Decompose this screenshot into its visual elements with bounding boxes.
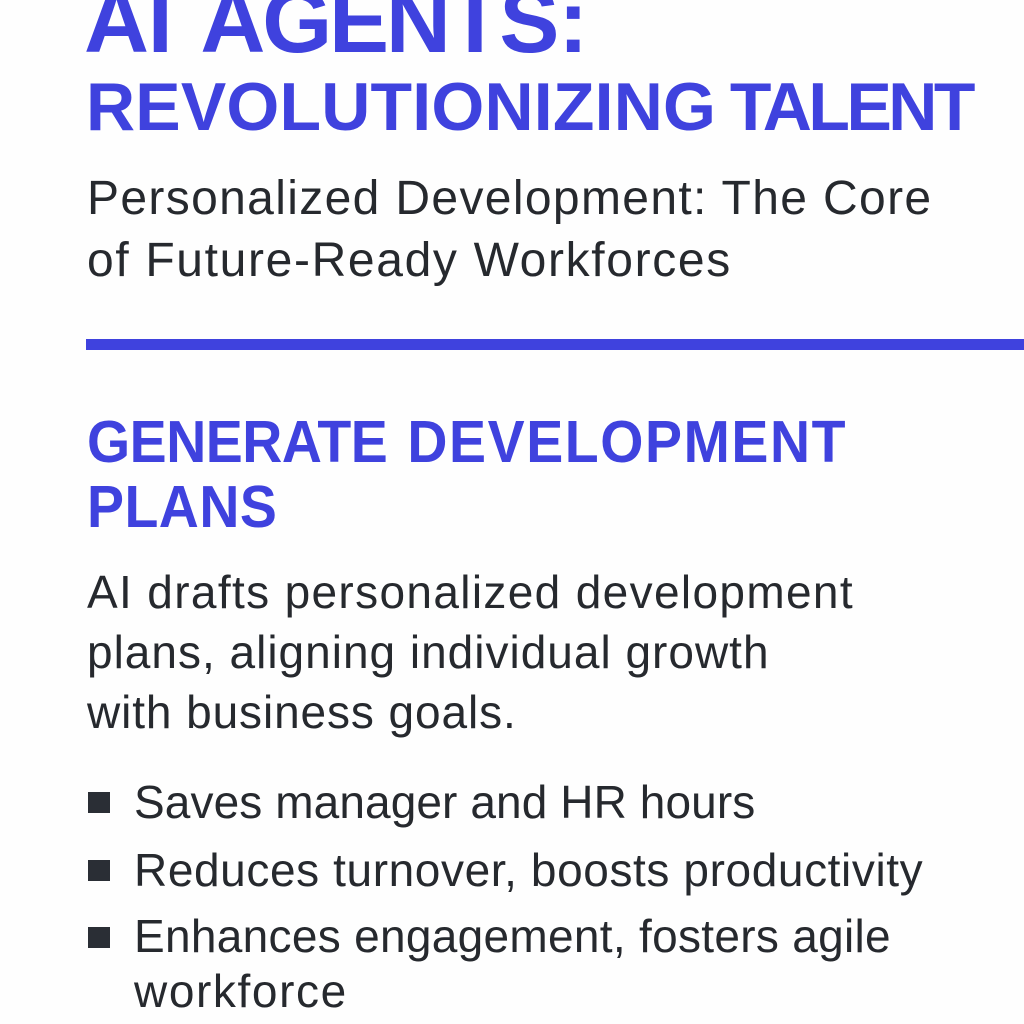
bullet 2: Reduces turnover, boosts productivity: [134, 844, 923, 896]
subtitle heading: REVOLUTIONIZING TALENT: [86, 69, 972, 145]
tagline: [87, 172, 932, 287]
description: with business goals.: [87, 686, 517, 738]
bullet 3: workforce: [134, 965, 348, 1017]
bullet 1: Saves manager and HR hours: [134, 776, 755, 828]
section heading: GENERATE DEVELOPMENT: [87, 409, 847, 475]
description: [87, 566, 854, 738]
divider: [86, 339, 1024, 350]
description: plans, aligning individual growth: [87, 626, 770, 678]
bullet list: [88, 776, 923, 1017]
section heading: [87, 409, 847, 540]
section heading: PLANS: [87, 474, 277, 540]
tagline: of Future-Ready Workforces: [87, 234, 732, 287]
bullet 3: Enhances engagement, fosters agile: [134, 910, 891, 962]
bullet 3: [88, 910, 891, 1017]
tagline: Personalized Development: The Core: [87, 172, 932, 225]
description: AI drafts personalized development: [87, 566, 854, 618]
